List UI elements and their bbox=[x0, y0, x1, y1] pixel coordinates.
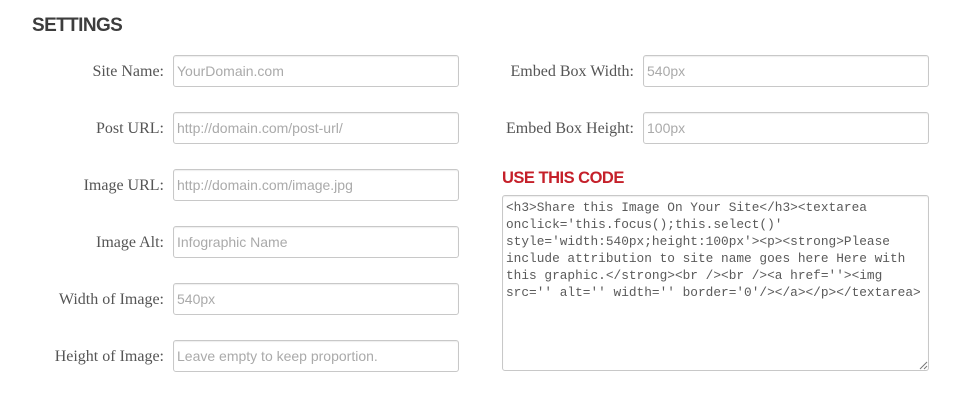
input: height of image bbox=[173, 340, 459, 372]
input: image url: http://domain.com/image.jpg bbox=[177, 177, 353, 193]
heading: settings: SETTINGS bbox=[32, 15, 122, 36]
code textarea bbox=[502, 195, 929, 371]
label: embed box height: Embed Box Height: bbox=[506, 120, 634, 137]
input: post url bbox=[173, 112, 459, 144]
input: image alt bbox=[173, 226, 459, 258]
icon: resize handle bbox=[920, 362, 928, 370]
input: embed box width bbox=[643, 55, 929, 87]
input: width of image bbox=[173, 283, 459, 315]
label: post url: Post URL: bbox=[96, 120, 164, 137]
input: image alt: Infographic Name bbox=[177, 234, 288, 250]
heading: use this code: USE THIS CODE bbox=[502, 169, 624, 187]
label: height of image: Height of Image: bbox=[55, 348, 164, 365]
label: image url: Image URL: bbox=[84, 177, 164, 194]
label: embed box width: Embed Box Width: bbox=[510, 63, 634, 80]
input: site name: YourDomain.com bbox=[177, 63, 284, 79]
code textarea: <h3>Share this Image On Your Site</h3><textarea onclick='this.focus();this.select()' style='width:540px;height:100px'><p><strong>Please include attribution to site name goes here Here with this graphic.</strong><br /><br /><a href=''><img src='' alt='' width='' border='0'/></a></p></textarea> bbox=[506, 200, 921, 300]
input: image url bbox=[173, 169, 459, 201]
input: embed box width: 540px bbox=[647, 63, 685, 79]
input: width of image: 540px bbox=[177, 291, 215, 307]
label: width of image: Width of Image: bbox=[59, 291, 164, 308]
input: embed box height: 100px bbox=[647, 120, 685, 136]
input: site name bbox=[173, 55, 459, 87]
input: height of image: Leave empty to keep proportion. bbox=[177, 348, 378, 364]
input: post url: http://domain.com/post-url/ bbox=[177, 120, 343, 136]
input: embed box height bbox=[643, 112, 929, 144]
label: site name: Site Name: bbox=[92, 63, 164, 80]
label: image alt: Image Alt: bbox=[96, 234, 164, 251]
